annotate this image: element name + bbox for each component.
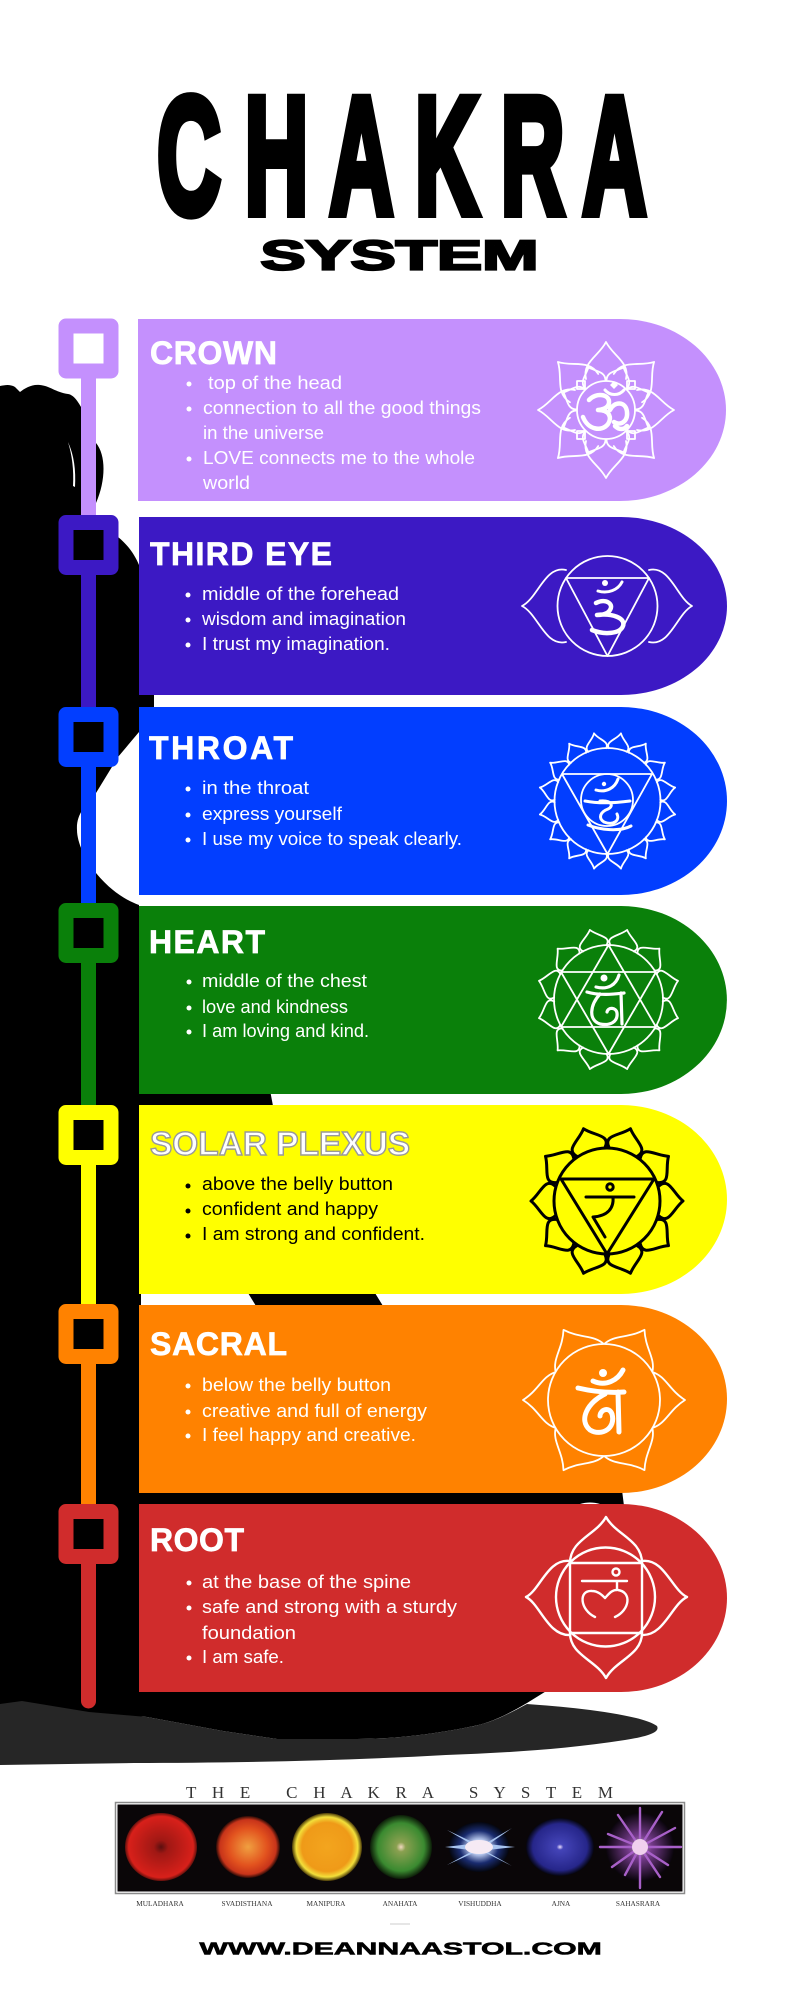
heading: root: ROOT [150, 1522, 244, 1558]
icon: crown lotus with om [538, 342, 674, 478]
icon: heart [535, 926, 682, 1073]
poster labels [136, 1899, 661, 1908]
bullet list: crown: world [202, 473, 250, 493]
spine timeline [66, 326, 111, 1708]
bullet list: heart: I am loving and kind. [202, 1021, 369, 1041]
crown node [66, 326, 111, 520]
poster labels: MULADHARA [136, 1899, 184, 1908]
orb: anahata [370, 1815, 432, 1879]
bullet list: crown: connection to all the good things [203, 398, 481, 418]
orb: muladhara [125, 1813, 197, 1881]
icon: root [526, 1517, 687, 1678]
panel: sacral [139, 1305, 727, 1493]
bullet list: crown: top of the head [208, 373, 342, 393]
ground shadow [0, 1701, 658, 1765]
bullet list: solar plexus [186, 1174, 425, 1244]
orb: manipura [292, 1813, 362, 1881]
orb: ajna [526, 1818, 594, 1876]
bullet list: sacral: below the belly button [202, 1375, 391, 1395]
bullet list: throat [186, 778, 462, 849]
bullet list: throat: in the throat [202, 778, 309, 798]
bullet list: throat: express yourself [202, 804, 343, 824]
bullet list: sacral: creative and full of energy [202, 1401, 427, 1421]
orb: svadisthana [216, 1816, 280, 1878]
bullet list: root: safe and strong with a sturdy [202, 1597, 457, 1617]
bullet list: crown: in the universe [203, 423, 324, 443]
poster labels: ANAHATA [383, 1899, 418, 1908]
bullet list: solar plexus: I am strong and confident. [202, 1224, 425, 1244]
bullet list: third eye: middle of the forehead [202, 584, 399, 604]
silhouette: seated figure [0, 385, 624, 1739]
bullet list: heart [186, 971, 369, 1041]
bullet list: third eye [186, 584, 406, 654]
bullet list: sacral: I feel happy and creative. [202, 1425, 416, 1445]
orb: vishuddha [445, 1822, 515, 1872]
bullet list: root: at the base of the spine [202, 1572, 411, 1592]
poster labels: MANIPURA [307, 1899, 346, 1908]
heading: solar plexus: SOLAR PLEXUS [150, 1125, 410, 1162]
icon: third eye [522, 556, 692, 656]
orb: sahasrara [600, 1808, 681, 1888]
bullet list: crown: LOVE connects me to the whole [203, 448, 475, 468]
sacral node [66, 1312, 111, 1508]
heading: sacral: SACRAL [150, 1326, 287, 1362]
solar plexus node [66, 1112, 111, 1308]
icon: throat [538, 731, 677, 871]
bullet list: sacral [186, 1375, 427, 1445]
panel: heart [139, 906, 727, 1094]
poster labels: SAHASRARA [616, 1899, 661, 1908]
poster title: T H E C H A K R A S Y S T E M [186, 1783, 613, 1802]
website url: WWW.DEANNAASTOL.COM [199, 1939, 602, 1959]
panel: throat [139, 707, 727, 895]
icon: sacral [523, 1316, 685, 1484]
root node [66, 1512, 111, 1708]
bullet list: root: I am safe. [202, 1647, 284, 1667]
poster labels: VISHUDDHA [458, 1899, 502, 1908]
title: CHAKRA: CHAKRA [157, 64, 646, 249]
throat node [66, 714, 111, 906]
image panel: the chakra system poster [116, 1783, 684, 1924]
heading: heart: HEART [149, 924, 265, 960]
bullet list: crown [186, 373, 481, 493]
bullet list: root: foundation [202, 1623, 296, 1643]
bullet list: solar plexus: confident and happy [202, 1199, 378, 1219]
bullet list: third eye: I trust my imagination. [202, 634, 390, 654]
poster labels: SVADISTHANA [222, 1899, 273, 1908]
heading: crown: CROWN [150, 335, 277, 371]
bullet list: throat: I use my voice to speak clearly. [202, 829, 462, 849]
heart node [66, 910, 111, 1108]
heading: throat: THROAT [149, 730, 293, 766]
heading: third eye: THIRD EYE [150, 536, 332, 572]
poster frame [116, 1802, 684, 1894]
bullet list: root [186, 1572, 457, 1667]
panel: root [139, 1504, 727, 1692]
bullet list: third eye: wisdom and imagination [201, 609, 406, 629]
panel: third eye [139, 517, 727, 695]
panel: solar plexus [139, 1105, 727, 1294]
bullet list: solar plexus: above the belly button [202, 1174, 393, 1194]
subtitle: SYSTEM: SYSTEM [260, 231, 538, 278]
bullet list: heart: middle of the chest [202, 971, 367, 991]
third eye node [66, 522, 111, 710]
poster labels: AJNA [552, 1899, 571, 1908]
icon: solar plexus [531, 1123, 683, 1279]
bullet list: heart: love and kindness [202, 997, 348, 1017]
panel: crown [138, 319, 726, 501]
